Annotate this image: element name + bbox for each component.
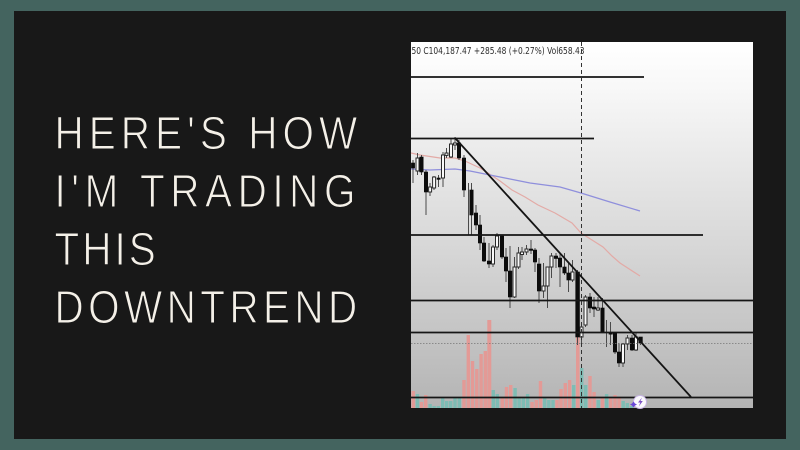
title: I'M TRADING [54,167,355,218]
title: HERE'S HOW [54,109,357,160]
moving average: blue [411,169,640,211]
chart header text: 50 C104,187.47 +285.48 (+0.27%) Vol658.43 [412,46,584,57]
title: THIS [54,225,156,276]
price dotted line [411,342,753,344]
title: DOWNTREND [54,283,357,334]
trend line [455,138,691,397]
crosshair vertical [580,42,582,408]
title [54,109,357,334]
chart background [411,42,753,408]
black candle bodies [411,143,642,363]
icon: lightning badge [630,396,646,408]
panel: candlestick chart [411,42,753,408]
white candle bodies [416,143,638,363]
moving average: red [411,153,640,276]
wicks [413,137,640,367]
horizontal levels [411,77,753,398]
volume bars [412,320,633,408]
